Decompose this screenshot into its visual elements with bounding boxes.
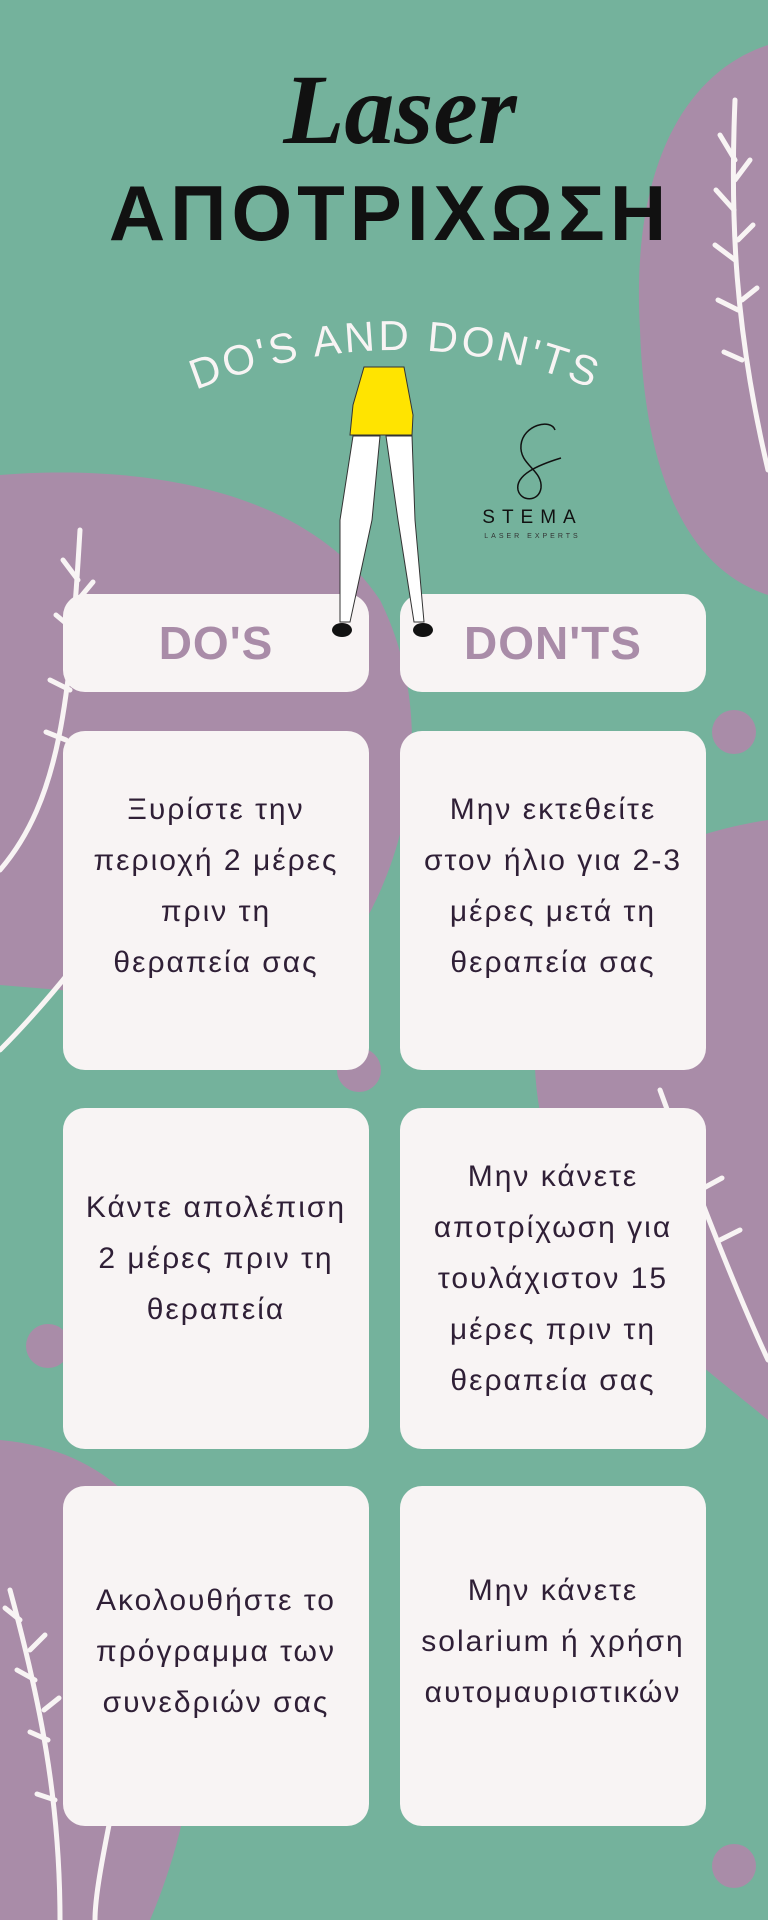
logo: STEMA: STEMA [482, 507, 583, 528]
card: do 3: Ακολουθήστε το πρόγραμμα των συνεδριών σας [96, 1584, 336, 1718]
title: ΑΠΟΤΡΙΧΩΣΗ: ΑΠΟΤΡΙΧΩΣΗ [109, 169, 671, 257]
card: dont 3: Μην κάνετε solarium ή χρήση αυτομαυριστικών [421, 1574, 685, 1708]
card: dont 2 [400, 1108, 706, 1449]
icon: legs illustration [332, 366, 433, 637]
logo: STEMA: LASER EXPERTS [484, 533, 581, 540]
card: do 2: Κάντε απολέπιση 2 μέρες πριν τη θεραπεία [86, 1191, 346, 1326]
card: do 1 [63, 731, 369, 1070]
card: dont 2: Μην κάνετε αποτρίχωση για τουλάχιστον 15 μέρες πριν τη θεραπεία σας [434, 1160, 672, 1397]
card: dont 1: Μην εκτεθείτε στον ήλιο για 2-3 μέρες μετά τη θεραπεία σας [424, 792, 682, 978]
header: DO'S: DO'S [159, 617, 273, 669]
subtitle arc: DO'S AND DON'TS: DO'S AND DON'TS [189, 321, 598, 389]
header: DON'TS: DON'TS [464, 617, 642, 669]
card: do 2 [63, 1108, 369, 1449]
title: Laser: Laser [283, 54, 517, 165]
card: do 1: Ξυρίστε την περιοχή 2 μέρες πριν τη θεραπεία σας [93, 792, 339, 978]
header: DON'TS [400, 594, 706, 692]
card: dont 3 [400, 1486, 706, 1826]
header: DO'S [63, 594, 369, 692]
card: do 3 [63, 1486, 369, 1826]
card: dont 1 [400, 731, 706, 1070]
logo: STEMA [482, 423, 583, 540]
